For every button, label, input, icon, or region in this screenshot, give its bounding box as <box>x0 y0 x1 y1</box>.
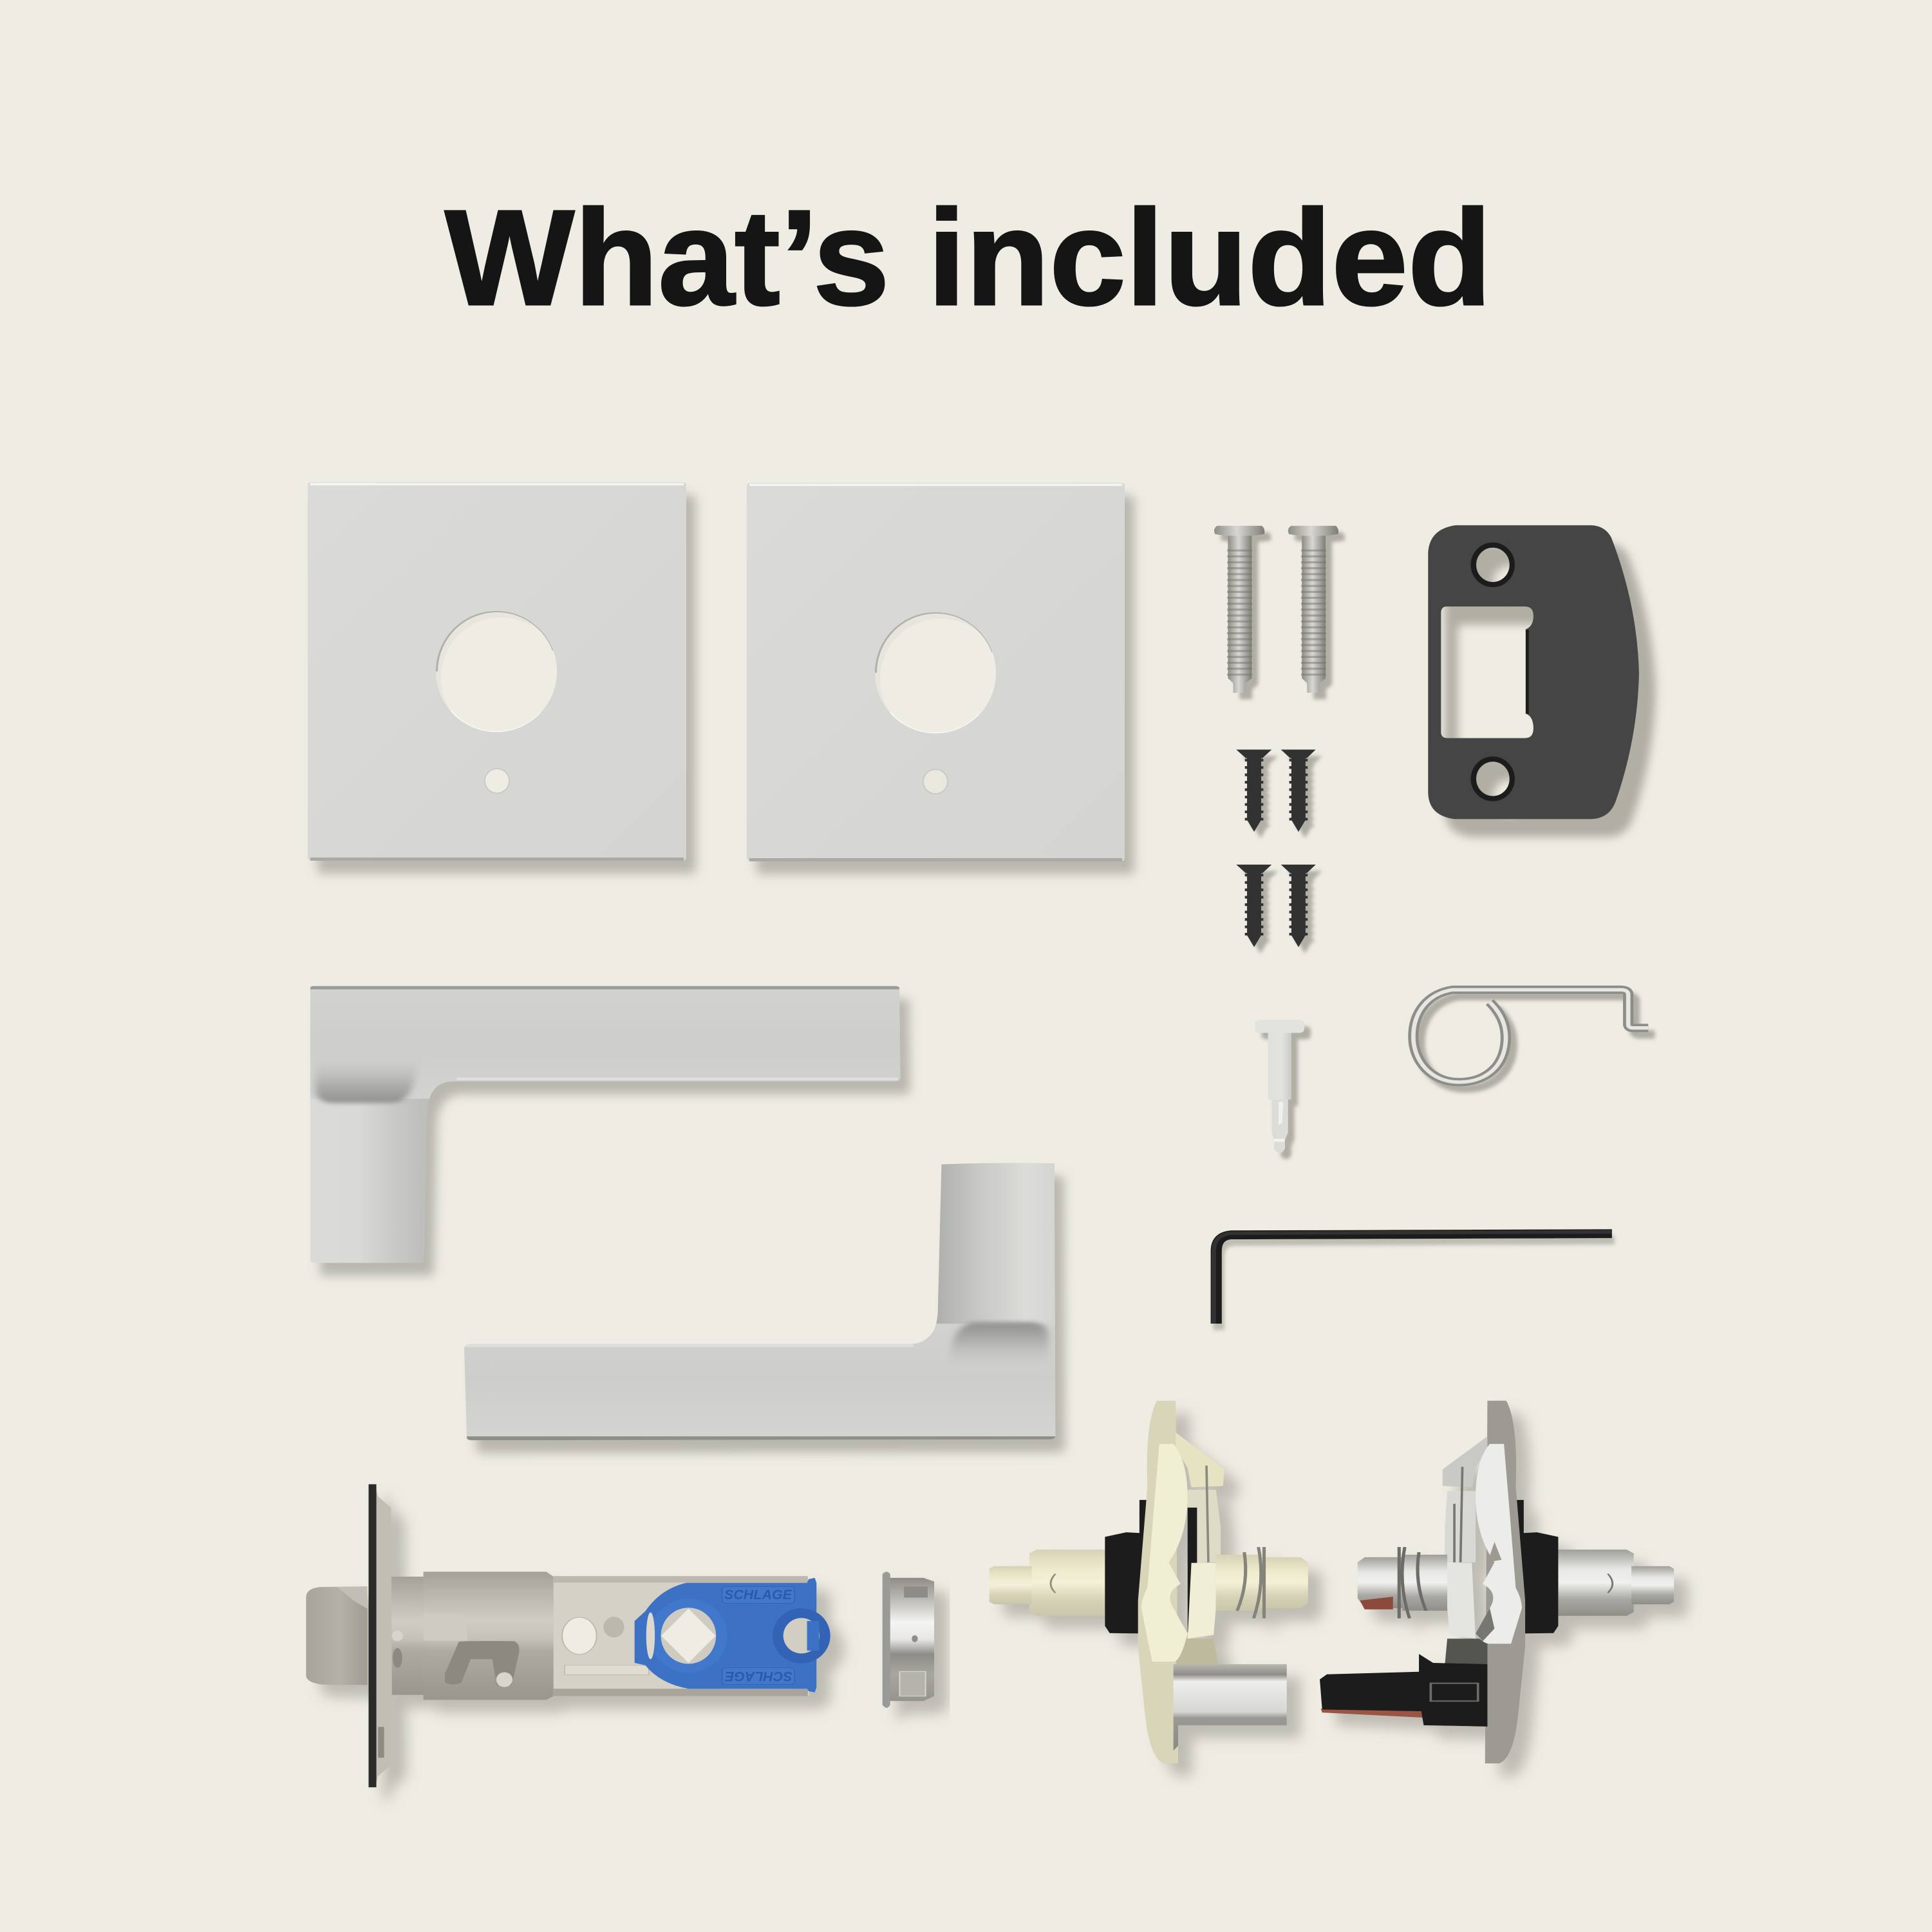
housing top edge <box>554 1576 808 1582</box>
retainer ring <box>650 1599 727 1673</box>
screw 1 <box>1214 526 1264 693</box>
cylinder pin <box>496 1672 512 1687</box>
shaft head <box>1261 1557 1308 1608</box>
red reflection <box>1360 1597 1393 1609</box>
retainer diamond <box>661 1609 716 1663</box>
small holes <box>392 1630 403 1668</box>
connector clip <box>1430 1683 1478 1701</box>
spindle dimple <box>1608 1574 1613 1593</box>
screw 2 <box>1288 526 1338 693</box>
wood screw bottom right <box>1281 865 1316 947</box>
wire <box>1206 1466 1208 1562</box>
panel: black wood screws <box>1236 749 1316 947</box>
spindle tip <box>989 1566 1032 1604</box>
nut knurl top <box>904 1586 928 1598</box>
icon: plastic pin <box>1255 1020 1304 1153</box>
retainer boss <box>773 1608 830 1664</box>
lower cylinder <box>1174 1664 1287 1750</box>
blue retainer <box>635 1578 816 1693</box>
nut flange <box>883 1571 890 1708</box>
cream spine <box>1141 1444 1188 1662</box>
spindle tip <box>1631 1566 1674 1604</box>
icon: hex key <box>1214 1232 1612 1324</box>
plate spindle hole <box>436 611 557 732</box>
back plate <box>1138 1401 1178 1763</box>
latch bolt <box>306 1586 368 1685</box>
mirrored body <box>1358 1401 1674 1763</box>
lever bottom edge <box>464 1436 1057 1441</box>
boss opening <box>783 1618 820 1653</box>
lever bottom highlight <box>456 1078 897 1080</box>
lever dent <box>313 1068 416 1106</box>
panel: machine screws <box>1214 526 1338 693</box>
strike body with window and holes <box>1428 525 1639 819</box>
infographic canvas <box>306 205 1694 1803</box>
lever top highlight <box>465 1344 913 1347</box>
black connector <box>1320 1654 1487 1727</box>
lever stem <box>933 1161 1057 1324</box>
brand text top: SCHLAGE <box>724 1588 792 1602</box>
black knob <box>1515 1500 1558 1633</box>
black strip <box>1188 1508 1197 1633</box>
retainer opening <box>661 1608 716 1664</box>
panel: right square rose plate <box>747 483 1125 861</box>
housing hole <box>562 1617 597 1655</box>
latch housing <box>554 1576 809 1696</box>
panel: left square rose plate <box>308 482 686 861</box>
panel: lever handle upper <box>305 984 906 1264</box>
housing rivet <box>603 1617 624 1638</box>
latch plate <box>1188 1563 1216 1638</box>
spring shaft <box>1402 1555 1447 1611</box>
retainer slot <box>646 1612 655 1659</box>
plate screw hole <box>923 769 948 794</box>
nut pin <box>912 1635 918 1642</box>
nut window <box>899 1671 926 1696</box>
housing slot <box>565 1665 649 1674</box>
boss inner tab <box>807 1621 819 1651</box>
strike inner edge <box>1526 630 1529 714</box>
cylinder highlight <box>424 1613 467 1641</box>
cylinder slot <box>445 1641 520 1685</box>
spring coils <box>1399 1547 1426 1618</box>
strike hole rims <box>1474 545 1512 799</box>
chrome spine <box>1476 1444 1522 1644</box>
lever body <box>305 984 906 1264</box>
panel: left inner mechanism <box>989 1401 1308 1763</box>
panel: tubular latch <box>306 1484 830 1787</box>
plate screw hole <box>485 769 509 793</box>
lever body <box>462 1161 1060 1442</box>
brand panels <box>722 1586 794 1685</box>
panel: strike plate <box>1428 525 1639 819</box>
spindle dimple <box>1051 1574 1055 1593</box>
bracket lower <box>1445 1638 1487 1664</box>
latch cylinder <box>424 1571 554 1700</box>
icon: torsion spring <box>1413 989 1648 1082</box>
shaft head <box>1358 1557 1402 1608</box>
red connector reflection <box>1321 1709 1423 1718</box>
wires <box>1454 1467 1463 1562</box>
panel: ring nut <box>883 1571 934 1708</box>
panel: lever handle lower <box>462 1161 1060 1442</box>
latch plate <box>1447 1563 1476 1638</box>
bracket middle <box>1445 1491 1476 1562</box>
chrome dark band <box>1476 1608 1494 1641</box>
housing bottom edge <box>554 1689 808 1696</box>
latch faceplate <box>369 1484 392 1787</box>
wood screw top left <box>1236 749 1271 832</box>
back plate <box>1485 1401 1525 1763</box>
panel: right outer mechanism <box>1320 1401 1674 1763</box>
lever dent <box>950 1320 1051 1356</box>
title: What’s included <box>445 182 1492 333</box>
bracket middle <box>1188 1490 1221 1562</box>
bolt facet <box>337 1586 368 1609</box>
black knob <box>1105 1500 1147 1633</box>
bracket top <box>1443 1436 1487 1487</box>
lever top edge <box>310 986 900 989</box>
bracket lower <box>1176 1638 1218 1664</box>
wood screw bottom left <box>1236 865 1271 947</box>
chrome shading <box>1487 1542 1501 1562</box>
bracket top <box>1176 1432 1224 1487</box>
spindle stem <box>1558 1550 1634 1616</box>
spring shaft <box>1216 1555 1261 1611</box>
plate spindle hole <box>875 612 996 733</box>
brand text bottom: SCHLAGE <box>724 1669 792 1683</box>
lever stem <box>310 1099 429 1264</box>
spindle stem <box>1029 1550 1105 1616</box>
wood screw top right <box>1281 749 1316 832</box>
spring coils <box>1237 1547 1264 1618</box>
nut body <box>889 1578 934 1701</box>
latch neck <box>391 1577 426 1695</box>
